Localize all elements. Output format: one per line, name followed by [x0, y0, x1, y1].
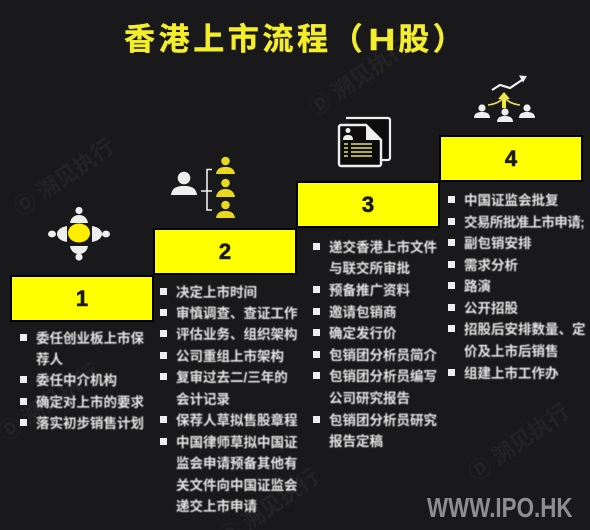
step box 4	[441, 137, 581, 180]
watermarks: Ⓓ 溯见执行	[464, 399, 574, 486]
list: step 3: 报告定稿	[329, 434, 383, 449]
list: step 4: 需求分析	[464, 258, 518, 273]
website label: WWW.IPO.HK	[427, 492, 573, 523]
icon: documents	[338, 116, 392, 168]
list: step 1: 落实初步销售计划	[36, 416, 144, 431]
title: 香港上市流程（ 股）	[124, 22, 467, 57]
watermarks: Ⓓ 溯见执行	[304, 34, 414, 121]
list: step 4: 公开招股	[464, 301, 518, 316]
title: H	[369, 22, 396, 57]
list: step 2: 会计记录	[176, 392, 230, 407]
icon: growth arrow with people	[474, 76, 535, 122]
list: step 4: 价及上市后销售	[464, 344, 558, 359]
step box 1: 1	[76, 286, 88, 311]
list: step 2: 公司重组上市架构	[176, 349, 284, 364]
list: step 4: 路演	[464, 279, 491, 294]
step box 2: 2	[219, 239, 231, 264]
list: step 1: 委任中介机构	[36, 373, 117, 388]
step box 3	[298, 183, 438, 226]
list: step 2: 关文件向中国证监会	[176, 478, 298, 493]
list: step 2: 监会申请预备其他有	[176, 456, 298, 471]
step box 1	[12, 277, 152, 320]
list: step 3: 预备推广资料	[329, 283, 410, 298]
list: step 4: 招股后安排数量、定	[464, 322, 586, 337]
list: step 2: 复审过去二/三年的	[176, 370, 288, 385]
step box 4: 4	[505, 146, 517, 171]
list: step 1: 荐人	[36, 352, 63, 367]
icon: org hierarchy	[171, 156, 235, 218]
list: step 3: 包销团分析员编写	[329, 369, 437, 384]
list: step 4: 中国证监会批复	[464, 193, 558, 208]
list: step 3: 包销团分析员简介	[329, 348, 437, 363]
list: step 3: 邀请包销商	[329, 305, 396, 320]
list: step 4: 交易所批准上市申请;	[464, 215, 584, 230]
list: step 2: 评估业务、组织架构	[176, 327, 298, 342]
list: step 3: 公司研究报告	[329, 391, 410, 406]
step box 3: 3	[362, 192, 374, 217]
watermarks: Ⓓ 溯见执行	[9, 134, 119, 221]
list: step 4: 组建上市工作办	[464, 366, 558, 381]
icon: round table meeting	[48, 206, 110, 261]
list: step 1: 确定对上市的要求	[36, 395, 144, 410]
list: step 1: 委任创业板上市保	[36, 331, 144, 346]
list: step 3: 确定发行价	[329, 326, 396, 341]
list: step 2: 递交上市申请	[176, 499, 257, 514]
list: step 3: 递交香港上市文件	[329, 240, 437, 255]
list: step 2: 审慎调查、查证工作	[176, 306, 298, 321]
list: step 2: 决定上市时间	[176, 285, 257, 300]
step box 2	[155, 230, 295, 273]
list: step 4: 副包销安排	[464, 236, 532, 251]
list: step 2: 中国律师草拟中国证	[176, 435, 298, 450]
list: step 3: 与联交所审批	[329, 261, 410, 276]
list: step 3: 包销团分析员研究	[329, 413, 437, 428]
list: step 2: 保荐人草拟售股章程	[176, 413, 298, 428]
